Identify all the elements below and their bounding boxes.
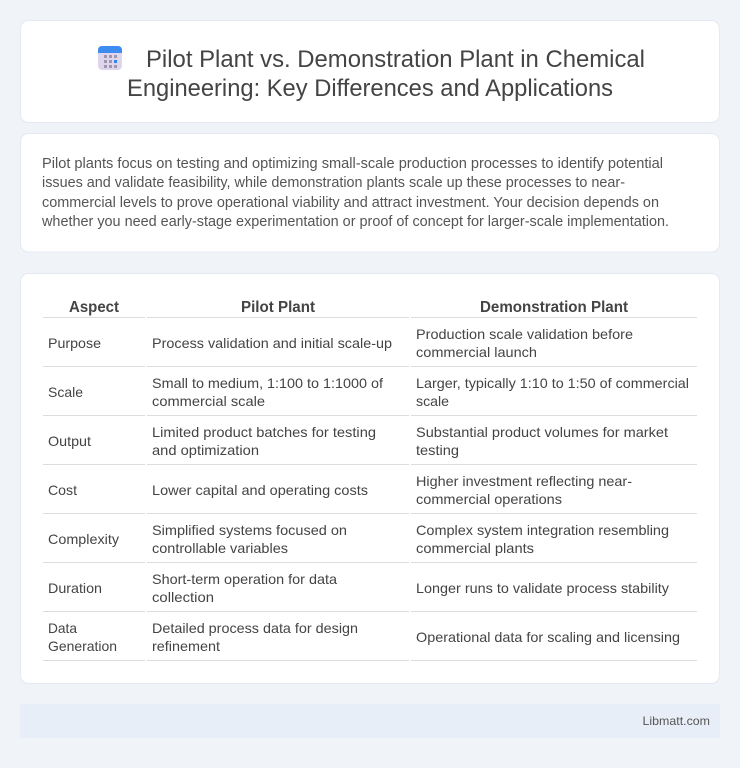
panel: introduction bbox=[20, 134, 720, 252]
table row: Output bbox=[43, 424, 697, 465]
text block: introduction paragraph: issues and validate feasibility, while demonstration plants scale up these processes to near- bbox=[42, 175, 625, 191]
footer bbox=[20, 704, 720, 738]
table header row: Aspect bbox=[69, 299, 120, 316]
table row: Duration: Short-term operation for data bbox=[152, 571, 337, 587]
panel: header bbox=[20, 20, 720, 122]
table row: Data Generation: Detailed process data for design bbox=[152, 620, 358, 636]
table row: Complexity: commercial plants bbox=[416, 540, 534, 556]
table row: Purpose bbox=[43, 326, 697, 367]
table row: Duration: collection bbox=[152, 589, 214, 605]
table row: Duration: Duration bbox=[48, 580, 102, 596]
text block: introduction paragraph: Pilot plants focus on testing and optimizing small-scale production processes to identify potential bbox=[42, 156, 663, 172]
table row: Scale: Small to medium, 1:100 to 1:1000 of bbox=[152, 375, 383, 391]
table header row bbox=[43, 299, 697, 318]
table row: Cost bbox=[43, 473, 697, 514]
table row: Cost: Higher investment reflecting near- bbox=[416, 473, 632, 489]
table header row: Pilot Plant bbox=[241, 299, 316, 316]
table row: Scale bbox=[43, 375, 697, 416]
table row: Purpose: Process validation and initial scale-up bbox=[152, 335, 392, 351]
table row: Cost: Cost bbox=[48, 482, 77, 498]
title: Pilot Plant vs. Demonstration Plant in Chemical bbox=[146, 46, 645, 73]
table row: Duration: Longer runs to validate process stability bbox=[416, 580, 669, 596]
table row: Cost: Lower capital and operating costs bbox=[152, 482, 368, 498]
table row: Duration bbox=[43, 571, 697, 612]
table row: Data Generation: refinement bbox=[152, 638, 220, 654]
table row: Purpose: commercial launch bbox=[416, 344, 537, 360]
table row: Complexity bbox=[43, 522, 697, 563]
table row: Data Generation: Operational data for scaling and licensing bbox=[416, 629, 680, 645]
table row: Data Generation bbox=[43, 620, 697, 661]
table row: Complexity: Complex system integration resembling bbox=[416, 522, 669, 538]
footer: Libmatt.com bbox=[642, 714, 710, 728]
table row: Scale: Scale bbox=[48, 384, 83, 400]
title: Engineering: Key Differences and Applications bbox=[127, 75, 613, 102]
table row: Cost: commercial operations bbox=[416, 491, 562, 507]
table row: Complexity: Complexity bbox=[48, 531, 119, 547]
text block: introduction paragraph: commercial levels to prove operational viability and attract investment. Your decision depends on bbox=[42, 195, 659, 211]
table row: Purpose: Purpose bbox=[48, 335, 101, 351]
table header row: Demonstration Plant bbox=[480, 299, 629, 316]
panel: comparison table bbox=[20, 274, 720, 684]
table row: Output: Limited product batches for testing bbox=[152, 424, 376, 440]
text block: introduction paragraph bbox=[41, 156, 669, 230]
table row: Scale: commercial scale bbox=[152, 393, 265, 409]
table row: Complexity: Simplified systems focused on bbox=[152, 522, 347, 538]
table row: Data Generation: Generation bbox=[48, 638, 117, 654]
table row: Scale: scale bbox=[416, 393, 449, 409]
text block: introduction paragraph: whether you need early-stage experimentation or proof of concept for larger-scale implementation. bbox=[41, 214, 669, 230]
table row: Output: testing bbox=[416, 442, 459, 458]
table row: Data Generation: Data bbox=[48, 620, 77, 636]
table row: Scale: Larger, typically 1:10 to 1:50 of commercial bbox=[416, 375, 689, 391]
table row: Output: and optimization bbox=[152, 442, 259, 458]
title bbox=[127, 46, 645, 102]
table row: Complexity: controllable variables bbox=[152, 540, 288, 556]
table row: Output: Output bbox=[48, 433, 91, 449]
table row: Output: Substantial product volumes for market bbox=[416, 424, 668, 440]
icon: calendar bbox=[98, 46, 122, 70]
table row: Purpose: Production scale validation before bbox=[416, 326, 633, 342]
